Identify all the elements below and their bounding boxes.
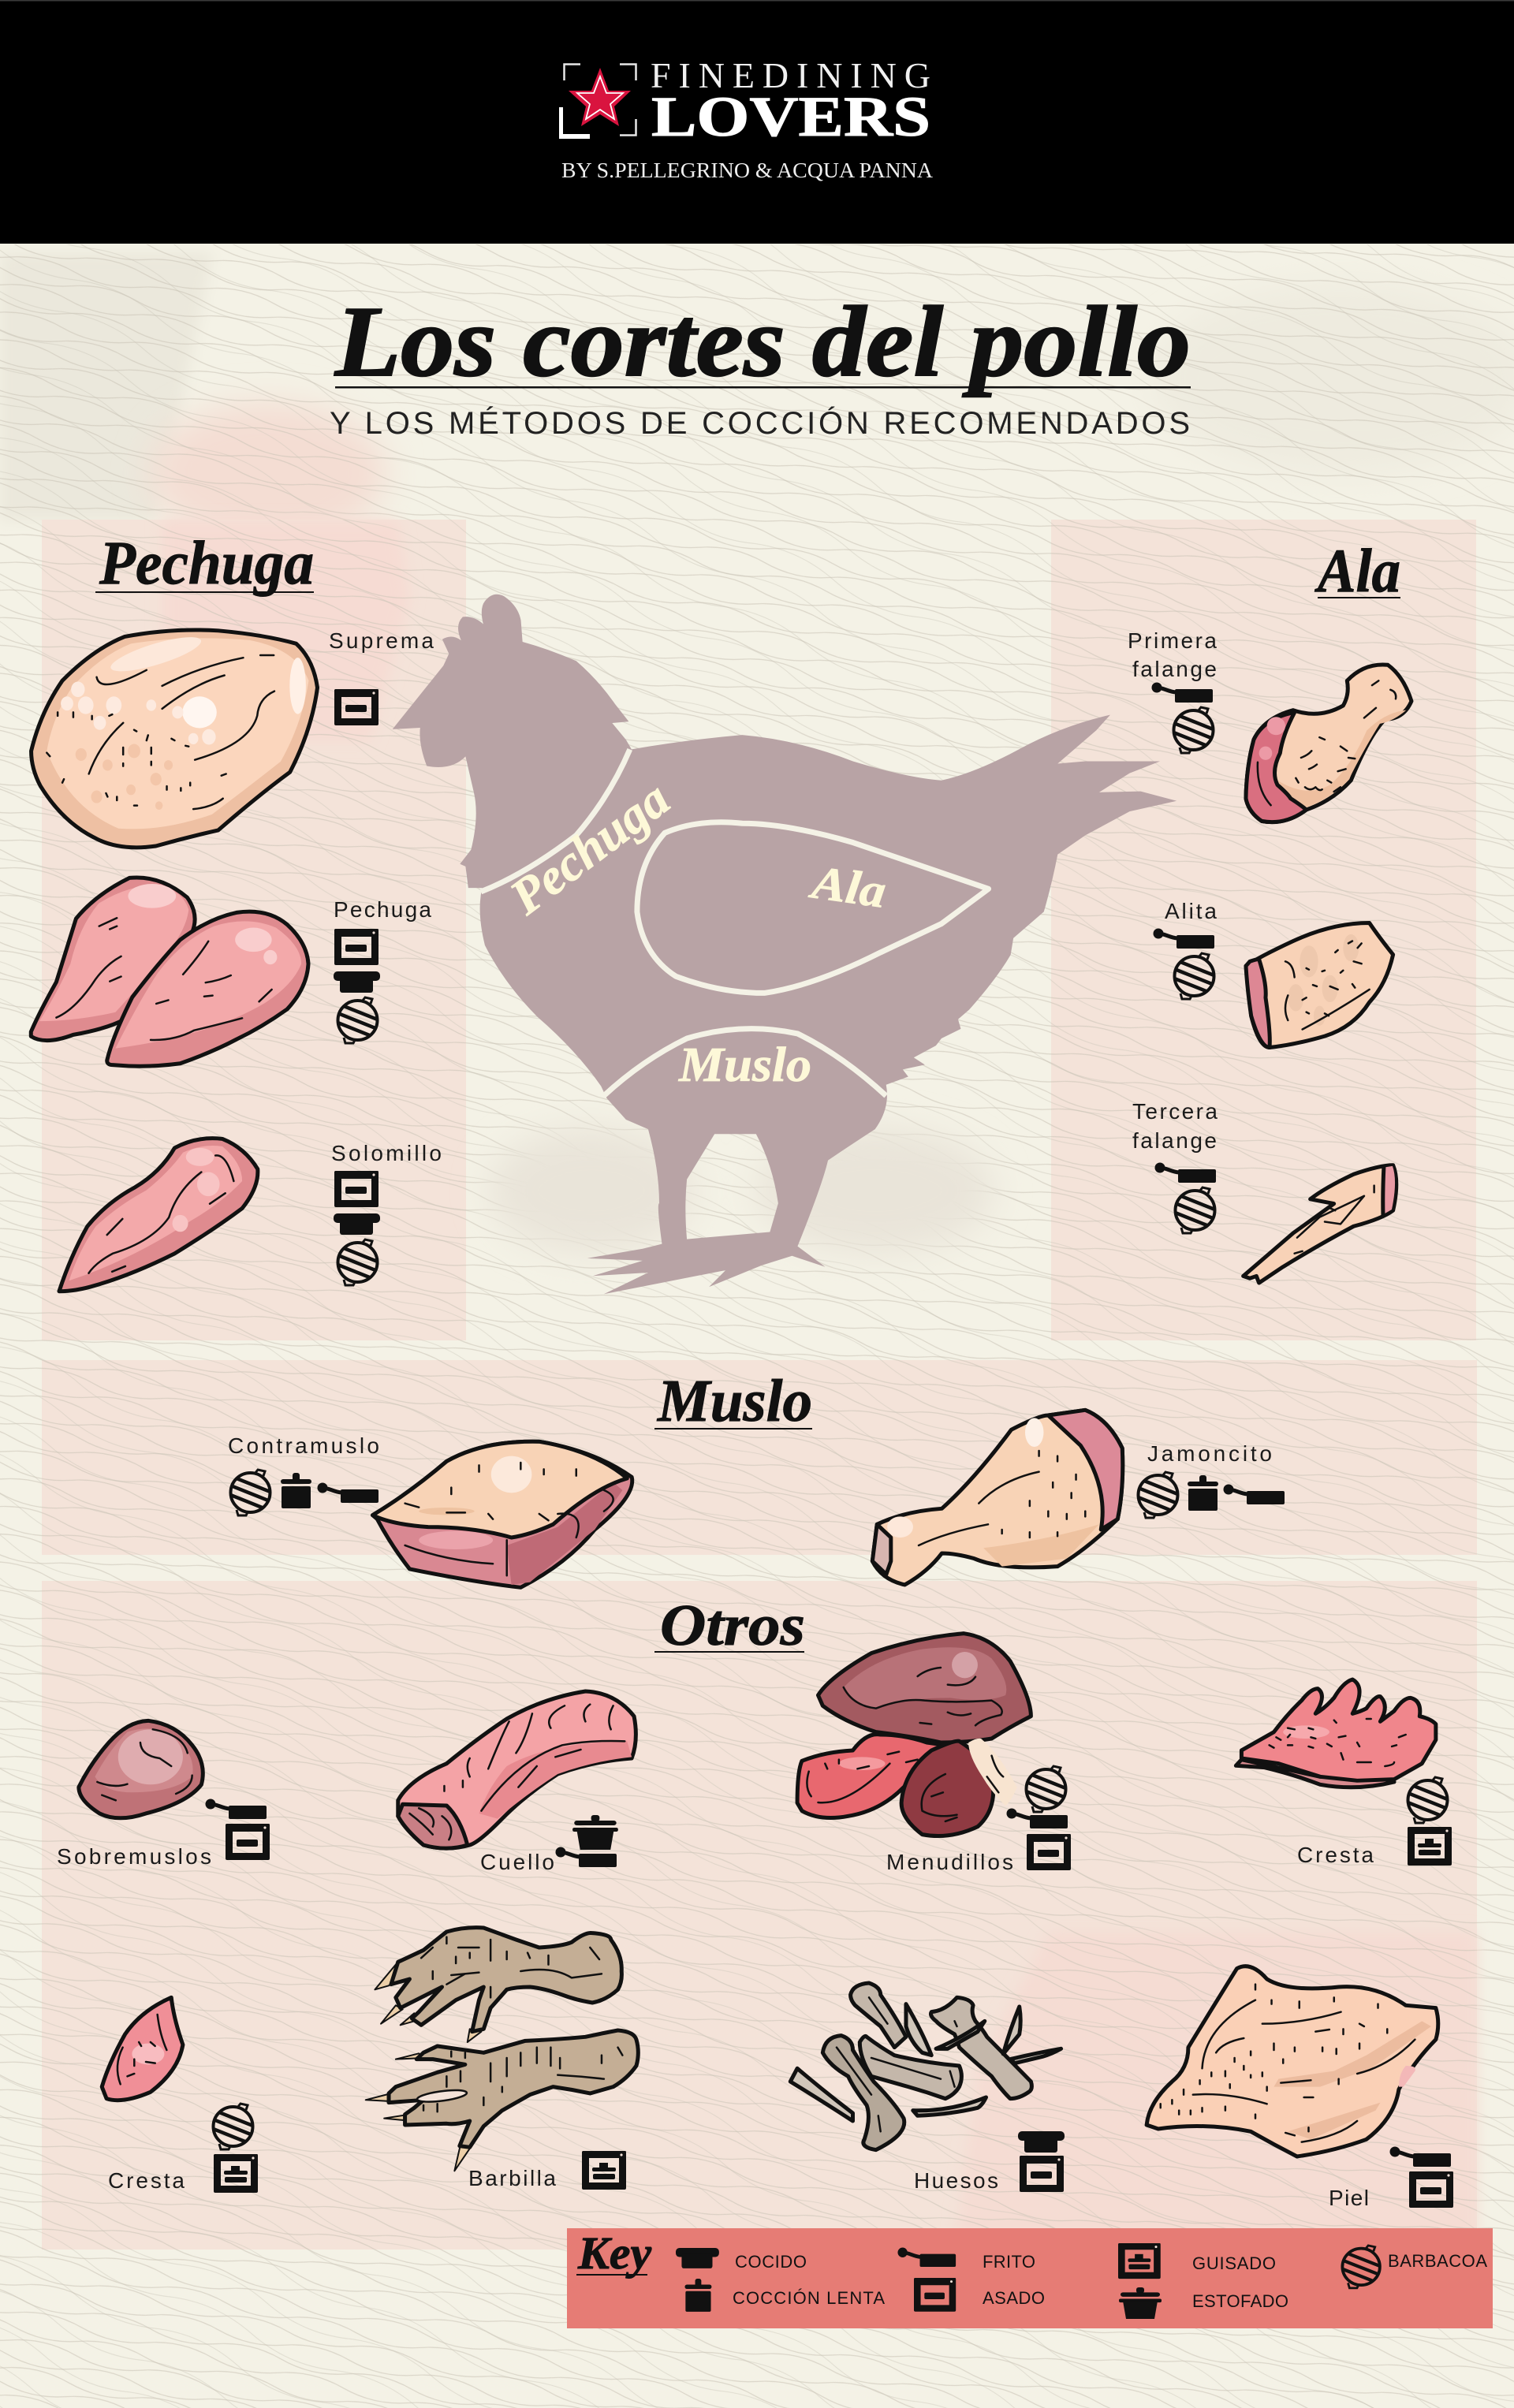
label: Alita: Alita [1165, 899, 1217, 923]
illustration: solomillo [59, 1139, 258, 1292]
label: Suprema: Suprema [329, 628, 434, 653]
icon: frito [1006, 1809, 1068, 1828]
legend heading: Key [577, 2227, 651, 2279]
legend item: guisado [1118, 2243, 1276, 2279]
label: Tercera falange: falange [1132, 1128, 1217, 1153]
illustration: cuello [398, 1691, 636, 1848]
heading: Muslo: Muslo [657, 1368, 812, 1434]
icon: barbacoa [336, 1239, 379, 1285]
label: Primera falange: falange [1132, 657, 1217, 681]
panel: Ala [1051, 520, 1476, 1340]
legend item: frito [897, 2248, 1035, 2272]
icon: estofado [572, 1815, 618, 1850]
heading: Otros: Otros [660, 1594, 805, 1658]
icon: frito [555, 1847, 617, 1867]
cut line: muslo [604, 1029, 886, 1096]
label: Primera falange: Primera [1128, 628, 1217, 653]
label: Cresta: Cresta [1297, 1843, 1374, 1867]
label: Piel: Piel [1329, 2186, 1369, 2210]
illustration: alita [1246, 923, 1393, 1047]
illustration: suprema [32, 630, 318, 848]
heading: Pechuga: Pechuga [99, 528, 314, 597]
illustration: pechuga fillets [31, 878, 308, 1066]
legend item: cocido: COCIDO [735, 2252, 807, 2272]
icon: frito [1154, 1162, 1216, 1183]
label: Jamoncito: Jamoncito [1147, 1441, 1272, 1466]
icon: asado [334, 689, 378, 725]
logo: brackets and star [559, 65, 636, 139]
chicken label: Muslo: Muslo [678, 1038, 811, 1092]
cut line: cuello [481, 749, 630, 892]
illustration: huesos [790, 1983, 1061, 2150]
legend item: estofado [1119, 2287, 1288, 2319]
chicken label: Ala: Ala [806, 855, 889, 918]
illustration: tercera falange [1244, 1165, 1397, 1283]
legend heading underline [576, 2274, 647, 2276]
title underline [335, 386, 1191, 388]
icon: frito [1224, 1484, 1285, 1504]
icon: frito [1151, 683, 1213, 703]
icon: barbacoa [1172, 707, 1215, 753]
title: Los cortes del pollo [334, 285, 1191, 397]
icon: barbacoa [1024, 1766, 1068, 1812]
label: Contramuslo: Contramuslo [228, 1433, 379, 1458]
chicken label: Pechuga: Pechuga [499, 770, 680, 926]
label: Huesos: Huesos [914, 2168, 998, 2193]
icon: barbacoa [211, 2104, 255, 2149]
logo wordmark LOVERS: LOVERS [651, 85, 930, 148]
label: Cuello: Cuello [480, 1850, 554, 1874]
icon: frito [1153, 929, 1214, 949]
icon: frito [317, 1482, 378, 1503]
logo wordmark FINEDINING: FINEDINING [651, 55, 930, 95]
heading underline [654, 1651, 804, 1653]
illustration: jamoncito [872, 1410, 1123, 1585]
panel: Muslo [42, 1360, 1477, 1587]
legend item: cocción lenta: COCCIÓN LENTA [733, 2288, 885, 2308]
label: Sobremuslos: Sobremuslos [57, 1844, 211, 1869]
icon: cocción lenta [281, 1473, 311, 1508]
legend item: estofado: ESTOFADO [1192, 2291, 1288, 2311]
illustration: contramuslo [373, 1441, 632, 1587]
label: Cresta: Cresta [108, 2168, 185, 2193]
label: Barbilla: Barbilla [468, 2166, 556, 2190]
icon: barbacoa [1173, 953, 1216, 999]
legend item: frito: FRITO [983, 2252, 1035, 2272]
logo tagline: BY S.PELLEGRINO & ACQUA PANNA [561, 158, 934, 182]
heading: Ala: Ala [1314, 536, 1400, 605]
icon: asado [226, 1824, 270, 1860]
label: Primera falange [1128, 628, 1217, 681]
legend: Key [567, 2227, 1493, 2328]
label: Menudillos: Menudillos [886, 1850, 1013, 1874]
panel: Pechuga [31, 520, 466, 1340]
heading underline [95, 591, 314, 593]
illustration: primera falange [1246, 665, 1411, 822]
icon: barbacoa [1406, 1777, 1449, 1823]
icon: barbacoa [336, 997, 379, 1043]
illustration: cresta derecha [1236, 1679, 1436, 1787]
icon: cocido [334, 1213, 380, 1235]
icon: barbacoa [229, 1470, 272, 1515]
illustration: barbilla (patas) [366, 1928, 638, 2171]
legend item: asado [914, 2278, 1045, 2312]
icon: asado [1027, 1834, 1071, 1870]
legend item: cocido [676, 2248, 807, 2272]
icon: barbacoa [1136, 1472, 1180, 1518]
chicken silhouette diagram [393, 595, 1177, 1294]
illustration: menudillos [797, 1634, 1031, 1836]
icon: cocido [1018, 2131, 1065, 2153]
legend item: barbacoa [1341, 2246, 1487, 2288]
cut line: ala [637, 822, 989, 993]
icon: asado [334, 1171, 378, 1207]
legend item: barbacoa: BARBACOA [1388, 2251, 1487, 2271]
label: Tercera falange [1132, 1099, 1218, 1153]
illustration: piel [1147, 1966, 1438, 2156]
illustration: cresta izquierda [102, 1997, 183, 2100]
subtitle: Y LOS MÉTODOS DE COCCIÓN RECOMENDADOS [330, 405, 1190, 441]
icon: asado [334, 929, 378, 965]
panel: Otros [42, 1581, 1477, 2250]
heading underline [1318, 597, 1400, 598]
icon: frito [205, 1799, 267, 1819]
icon: frito [1389, 2146, 1451, 2167]
legend item: cocción lenta [684, 2279, 885, 2312]
heading underline [654, 1428, 812, 1430]
legend item: guisado: GUISADO [1192, 2253, 1276, 2273]
label: Pechuga: Pechuga [334, 897, 431, 922]
label: Tercera falange: Tercera [1132, 1099, 1218, 1124]
icon: guisado [214, 2154, 258, 2193]
icon: guisado [1408, 1827, 1452, 1866]
chicken shadow [489, 1128, 994, 1254]
illustration: sobremuslos [79, 1720, 203, 1818]
label: Solomillo: Solomillo [331, 1141, 442, 1165]
icon: asado [1409, 2171, 1453, 2208]
header band with logo [0, 0, 1514, 244]
legend item: asado: ASADO [983, 2288, 1045, 2308]
icon: cocción lenta [1188, 1475, 1218, 1511]
icon: cocido [334, 971, 380, 993]
chicken body [393, 595, 1177, 1294]
icon: asado [1020, 2156, 1064, 2192]
icon: guisado [582, 2151, 626, 2190]
icon: barbacoa [1173, 1187, 1217, 1233]
